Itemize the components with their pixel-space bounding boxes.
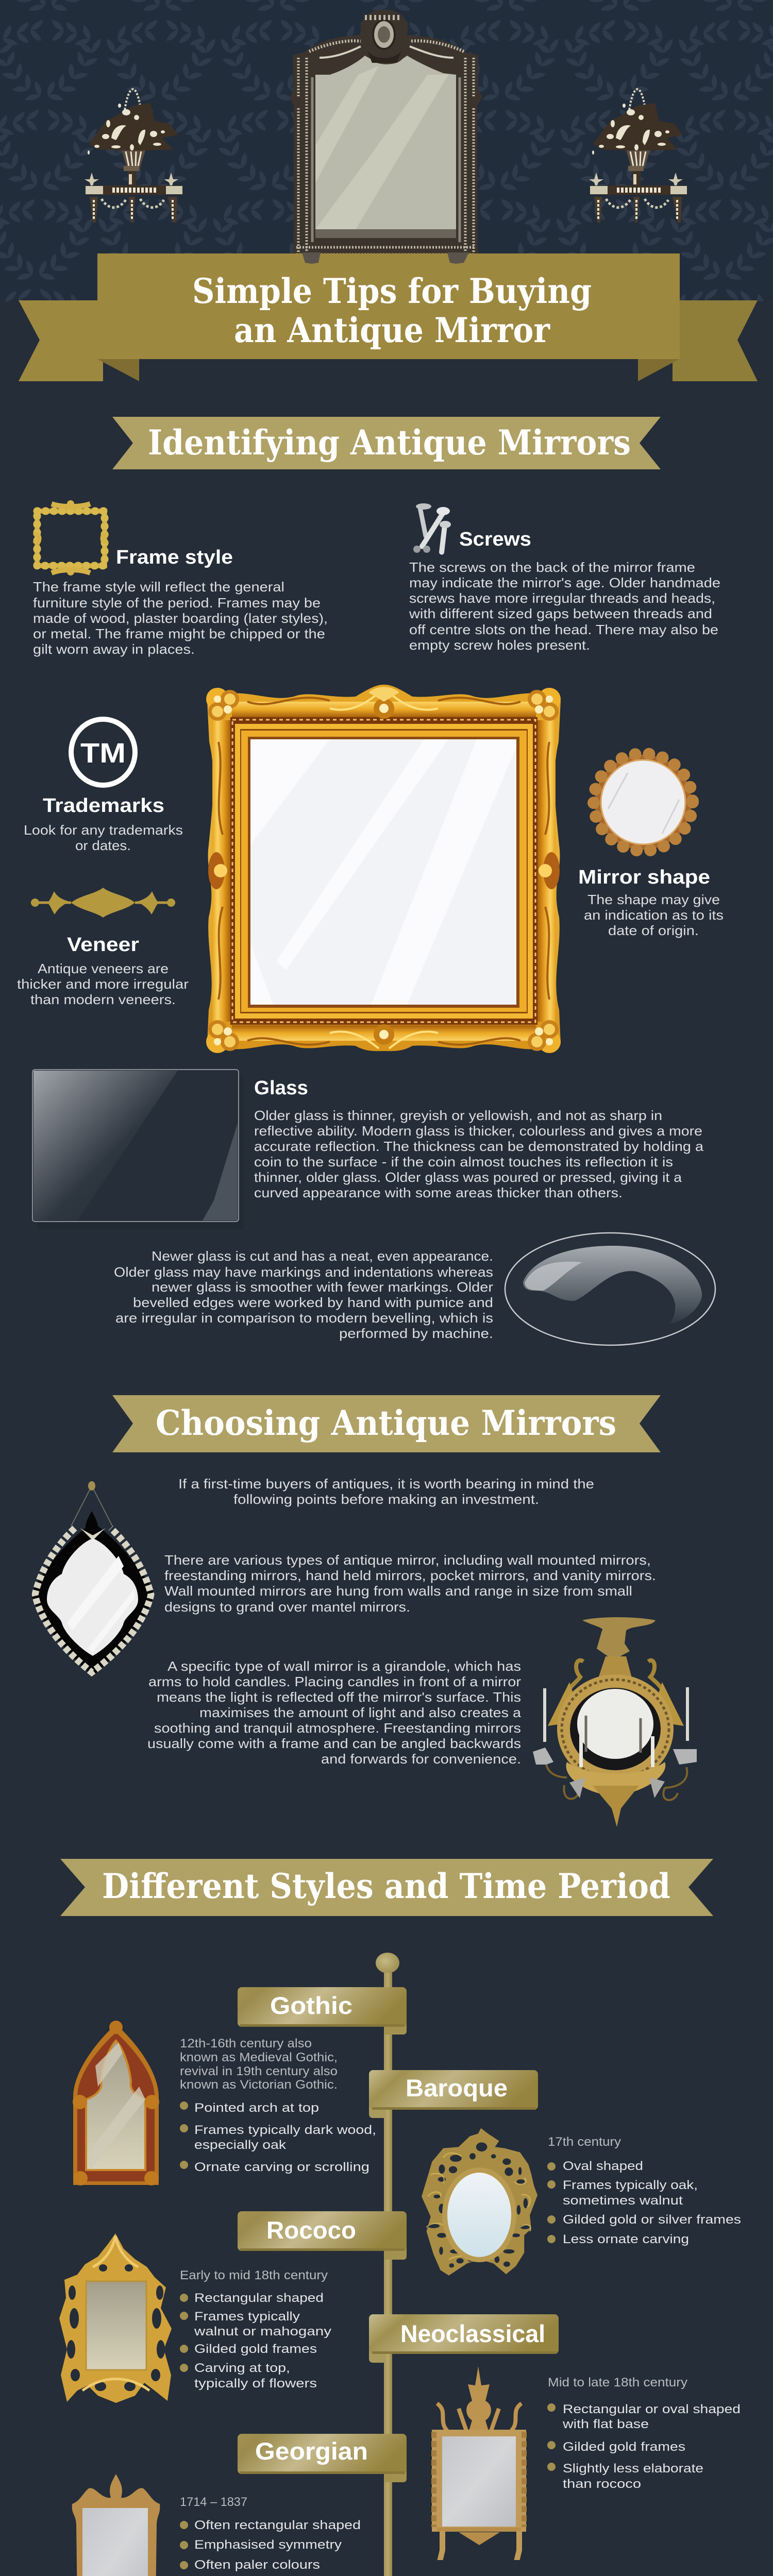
- timeline pole: [261, 1953, 515, 2576]
- trademarks text: or dates.: [75, 838, 131, 853]
- girandole text: [147, 1658, 522, 1767]
- wall mirrors text: designs to grand over mantel mirrors.: [164, 1599, 410, 1615]
- section banner: styles: [60, 1859, 713, 1916]
- Gothic text: revival in 19th century also: [180, 2064, 338, 2078]
- girandole text: A specific type of wall mirror is a girandole, which has: [167, 1658, 521, 1674]
- mirror shape text: [584, 892, 724, 938]
- hero mirror: [290, 10, 482, 264]
- screws text: [409, 560, 720, 653]
- Gothic text: Frames typically dark wood,: [194, 2123, 376, 2137]
- girandole text: usually come with a frame and can be angled backwards: [147, 1736, 521, 1751]
- trademarks block: [24, 719, 183, 853]
- icon: glass disc: [505, 1233, 715, 1347]
- sconce: left: [85, 89, 182, 223]
- title ribbon: [19, 253, 758, 381]
- glass block: [32, 1070, 704, 1229]
- frame style text: gilt worn away in places.: [33, 641, 195, 657]
- frame style text: The frame style will reflect the general: [33, 579, 284, 595]
- wall mirrors text: [164, 1552, 656, 1615]
- Georgian text: Often paler colours: [194, 2558, 320, 2572]
- screws text: off centre slots on the head. There may also be: [409, 622, 718, 637]
- Baroque text: Less ornate carving: [563, 2232, 689, 2246]
- frame style text: or metal. The frame might be chipped or the: [33, 626, 325, 641]
- Gothic text: known as Victorian Gothic.: [180, 2078, 338, 2092]
- glass text: accurate reflection. The thickness can be demonstrated by holding a: [254, 1139, 704, 1154]
- icon: TM badge: TM: [80, 738, 126, 769]
- veneer text: thicker and more irregular: [17, 976, 189, 992]
- glass text: coin to the surface - if the coin almost touches its reflection it is: [254, 1154, 673, 1170]
- Georgian text: Often rectangular shaped: [194, 2518, 361, 2532]
- Georgian mirror: [72, 2474, 161, 2576]
- mirror shape block: Mirror shape: [578, 867, 710, 888]
- Neoclassical text: Gilded gold frames: [563, 2440, 685, 2454]
- ribbon: Neoclassical: Neoclassical: [400, 2320, 545, 2347]
- Rococo text: [180, 2268, 331, 2391]
- frame style text: made of wood, plaster boarding (later styles),: [33, 611, 328, 626]
- mirror shape block: [578, 754, 724, 938]
- Neoclassical mirror: [432, 2366, 526, 2559]
- trademarks text: [24, 822, 183, 853]
- Neoclassical text: Rectangular or oval shaped: [563, 2402, 741, 2416]
- Gothic text: 12th-16th century also: [180, 2037, 312, 2050]
- frame style block: Frame style: [116, 547, 233, 568]
- ribbon: Baroque: Baroque: [406, 2074, 508, 2102]
- bevelled glass block: [114, 1233, 715, 1347]
- ribbon: Rococo: [238, 2211, 407, 2260]
- section banner: identifying: Identifying Antique Mirrors: [148, 422, 631, 463]
- glass text: [254, 1108, 704, 1200]
- ribbon: Neoclassical: [369, 2314, 559, 2363]
- glass text: curved appearance with some areas thicker than others.: [254, 1185, 623, 1200]
- bevelled glass text: newer glass is smoother with fewer markings. Older: [152, 1279, 493, 1295]
- Rococo text: Rectangular shaped: [194, 2291, 324, 2305]
- glass text: Older glass is thinner, greyish or yellowish, and not as sharp in: [254, 1108, 662, 1123]
- Neoclassical text: with flat base: [562, 2417, 649, 2431]
- trademarks text: Look for any trademarks: [24, 822, 183, 838]
- section banner: styles: Different Styles and Time Period: [102, 1866, 670, 1906]
- Rococo text: Gilded gold frames: [194, 2342, 317, 2356]
- Neoclassical text: than rococo: [563, 2477, 641, 2491]
- ribbon: Rococo: Rococo: [266, 2216, 356, 2244]
- icon: veneer ornament: [31, 888, 175, 918]
- intro text: If a first-time buyers of antiques, it is worth bearing in mind the: [178, 1476, 594, 1492]
- section banner: choosing: Choosing Antique Mirrors: [156, 1403, 616, 1443]
- Rococo text: Carving at top,: [194, 2361, 290, 2375]
- veneer text: Antique veneers are: [38, 961, 169, 976]
- wall mirrors text: There are various types of antique mirror, including wall mounted mirrors,: [164, 1552, 651, 1568]
- ribbon: Georgian: Georgian: [255, 2437, 368, 2465]
- intro text: following points before making an investment.: [233, 1492, 539, 1507]
- bevelled glass text: bevelled edges were worked by hand with pumice and: [133, 1295, 493, 1310]
- Rococo text: Early to mid 18th century: [180, 2268, 328, 2282]
- screws text: empty screw holes present.: [409, 637, 590, 653]
- Gothic text: especially oak: [194, 2138, 287, 2152]
- bevelled glass text: Newer glass is cut and has a neat, even appearance.: [152, 1248, 493, 1264]
- ribbon tails: [19, 300, 758, 381]
- ribbon: Gothic: Gothic: [270, 1992, 352, 2019]
- girandole text: maximises the amount of light and also creates a: [199, 1705, 522, 1720]
- icon: small gold frame: [34, 500, 108, 575]
- bevelled glass text: Older glass may have markings and indentations whereas: [114, 1264, 493, 1280]
- screws text: may indicate the mirror's age. Older handmade: [409, 575, 720, 590]
- Neoclassical text: [547, 2376, 741, 2491]
- Baroque text: sometimes walnut: [563, 2194, 683, 2208]
- Baroque text: Oval shaped: [563, 2159, 643, 2173]
- Gothic text: known as Medieval Gothic,: [180, 2050, 338, 2064]
- screws block: [409, 503, 720, 653]
- Baroque text: Frames typically oak,: [563, 2178, 698, 2192]
- wall mirrors text: Wall mounted mirrors are hung from walls and range in size from small: [164, 1583, 632, 1599]
- section banner: identifying: [112, 417, 661, 469]
- Gothic mirror: [73, 2021, 159, 2185]
- mirror glass: [250, 739, 516, 1005]
- Rococo text: walnut or mahogany: [194, 2325, 331, 2338]
- title text: Simple Tips for Buying: [192, 271, 592, 311]
- screws text: with different sized gaps between threads and: [409, 606, 712, 621]
- hero mirror feet: [302, 252, 469, 264]
- trademarks block: Trademarks: [43, 795, 164, 817]
- screws text: The screws on the back of the mirror frame: [409, 560, 695, 575]
- icon: scalloped mirror: [594, 754, 693, 851]
- frame corners: [206, 687, 561, 1053]
- glass text: reflective ability. Modern glass is thicker, colourless and gives a more: [254, 1123, 702, 1139]
- mirror shape text: The shape may give: [587, 892, 720, 907]
- Neoclassical text: Slightly less elaborate: [563, 2462, 703, 2476]
- ribbon: Georgian: [238, 2434, 407, 2482]
- Gothic text: Ornate carving or scrolling: [194, 2160, 369, 2174]
- icon: glass pane: [32, 1070, 244, 1229]
- Gothic text: Pointed arch at top: [194, 2101, 319, 2115]
- icon: TM badge: [71, 719, 135, 785]
- veneer block: Veneer: [67, 934, 139, 956]
- girandole text: arms to hold candles. Placing candles in front of a mirror: [148, 1674, 521, 1689]
- damask wallpaper panel: [0, 0, 773, 301]
- Georgian text: Emphasised symmetry: [194, 2538, 342, 2552]
- hanging black mirror: [31, 1481, 155, 1676]
- intro text: [178, 1476, 594, 1507]
- girandole text: means the light is reflected off the mirror's surface. This: [157, 1689, 521, 1705]
- frame style text: [33, 579, 328, 657]
- glass block: Glass: [254, 1077, 308, 1099]
- Baroque text: 17th century: [548, 2135, 621, 2149]
- Gothic text: [180, 2037, 376, 2174]
- veneer text: [17, 961, 189, 1007]
- bevelled glass text: performed by machine.: [339, 1326, 493, 1341]
- Rococo text: Frames typically: [194, 2310, 300, 2324]
- section banner: choosing: [112, 1395, 661, 1452]
- title text: an Antique Mirror: [234, 310, 550, 350]
- veneer block: [17, 888, 189, 1007]
- Georgian text: [180, 2495, 361, 2572]
- Rococo mirror: [59, 2233, 172, 2403]
- mirror shape text: an indication as to its: [584, 907, 724, 923]
- bevelled glass text: [114, 1248, 493, 1341]
- large gold frame: [206, 685, 561, 1053]
- girandole text: and forwards for convenience.: [321, 1751, 521, 1767]
- mirror shape text: date of origin.: [608, 923, 699, 938]
- frame style text: furniture style of the period. Frames may be: [33, 595, 321, 611]
- ribbon: Gothic: [238, 1987, 407, 2035]
- wall mirrors text: freestanding mirrors, hand held mirrors, pocket mirrors, and vanity mirrors.: [164, 1568, 656, 1583]
- bevelled glass text: are irregular in comparison to modern bevelling, which is: [115, 1310, 493, 1326]
- frame style block: [33, 500, 328, 657]
- sconce: right: [589, 89, 687, 223]
- girandole text: soothing and tranquil atmosphere. Freestanding mirrors: [154, 1720, 521, 1736]
- screws text: screws have more irregular threads and heads,: [409, 590, 715, 606]
- girandole mirror: [533, 1617, 697, 1827]
- Baroque text: [547, 2135, 741, 2246]
- glass text: thinner, older glass. Older glass was poured or pressed, giving it a: [254, 1170, 682, 1185]
- veneer text: than modern veneers.: [30, 992, 176, 1007]
- Baroque text: Gilded gold or silver frames: [563, 2213, 741, 2227]
- Baroque mirror: [422, 2128, 537, 2276]
- Rococo text: typically of flowers: [194, 2377, 317, 2391]
- screws block: Screws: [459, 529, 531, 550]
- title text: [192, 271, 592, 350]
- icon: screws: [413, 503, 451, 553]
- Georgian text: 1714 – 1837: [180, 2495, 247, 2509]
- Neoclassical text: Mid to late 18th century: [548, 2376, 687, 2389]
- ribbon: Baroque: [369, 2070, 538, 2118]
